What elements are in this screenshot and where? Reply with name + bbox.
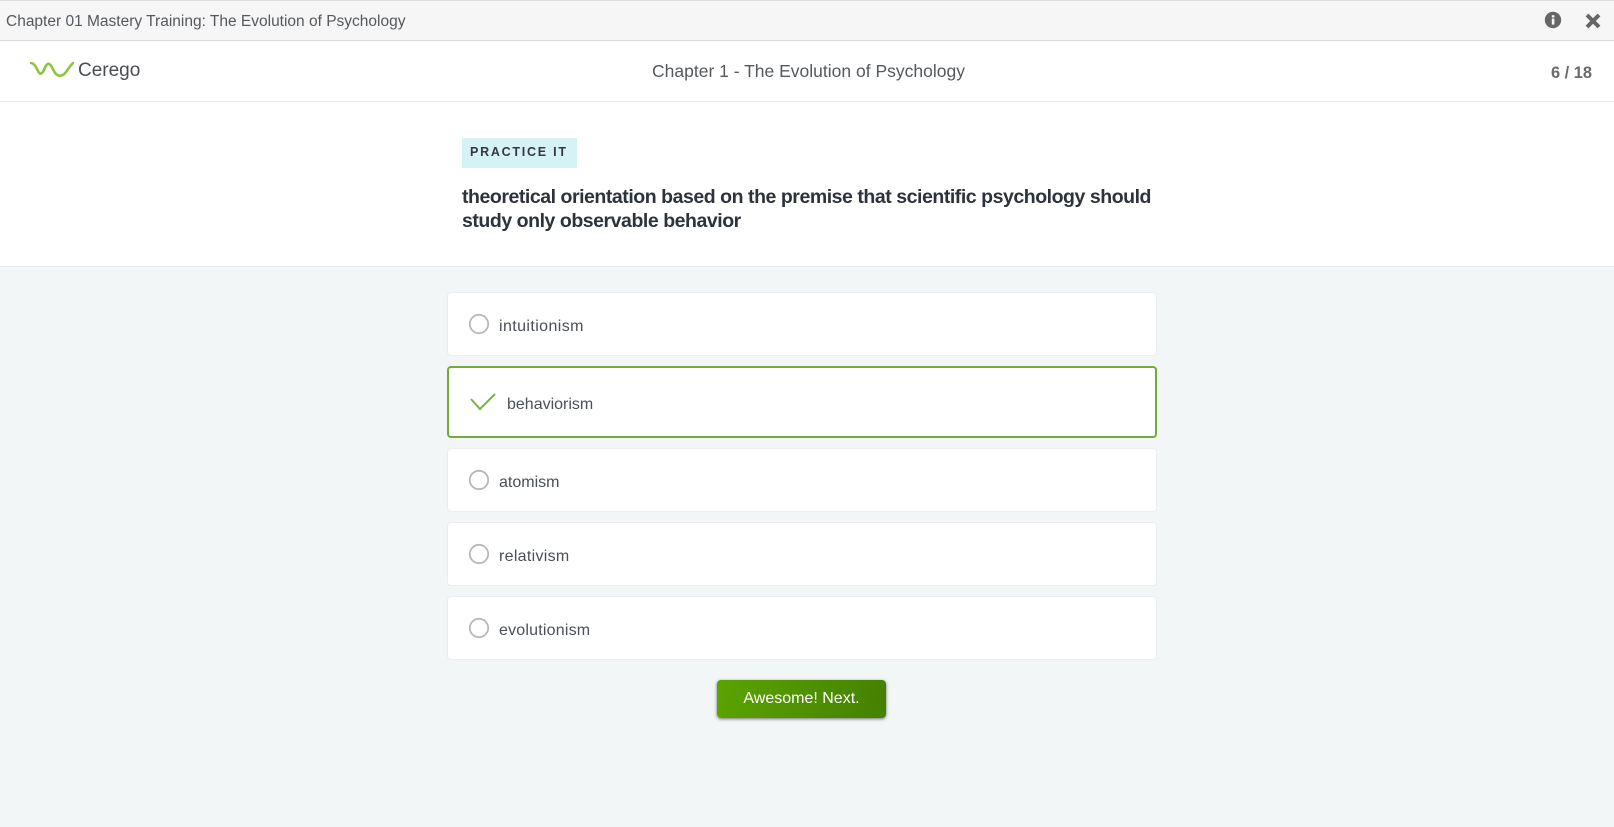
icon: radio: [468, 470, 490, 490]
question text: theoretical orientation based on the premise that scientific psychology should: [462, 186, 1151, 208]
badge: practice it: PRACTICE IT: [470, 145, 568, 159]
question text: study only observable behavior: [462, 210, 741, 232]
icon: radio: [468, 544, 490, 564]
button: next: Awesome! Next.: [743, 690, 860, 707]
badge: practice it: [462, 138, 577, 168]
question text: [462, 186, 1151, 232]
option label: intuitionism: [499, 318, 584, 335]
chapter heading: Chapter 1 - The Evolution of Psychology: [652, 61, 965, 81]
icon: logo wave: [30, 62, 74, 77]
logo wordmark: Cerego: [78, 60, 140, 81]
top bar: [0, 0, 1614, 41]
option label: behaviorism: [507, 396, 593, 413]
header: [0, 41, 1614, 102]
icon: close: [1586, 14, 1600, 28]
question panel: [0, 102, 1614, 267]
option: intuitionism: [447, 292, 1157, 356]
icon: info: [1544, 12, 1562, 28]
progress counter: 6 / 18: [1551, 64, 1592, 82]
option label: relativism: [499, 548, 570, 565]
option: behaviorism (correct): [447, 366, 1157, 438]
icon: radio: [468, 314, 490, 334]
icon: radio: [468, 618, 490, 638]
option: evolutionism: [447, 596, 1157, 660]
option: relativism: [447, 522, 1157, 586]
icon: check: [470, 393, 496, 410]
Cerego logo: [30, 60, 140, 81]
option: atomism: [447, 448, 1157, 512]
top bar title: Chapter 01 Mastery Training: The Evolution of Psychology: [6, 13, 405, 30]
option label: evolutionism: [499, 622, 590, 639]
option label: atomism: [499, 474, 559, 491]
button: next: [717, 680, 886, 718]
